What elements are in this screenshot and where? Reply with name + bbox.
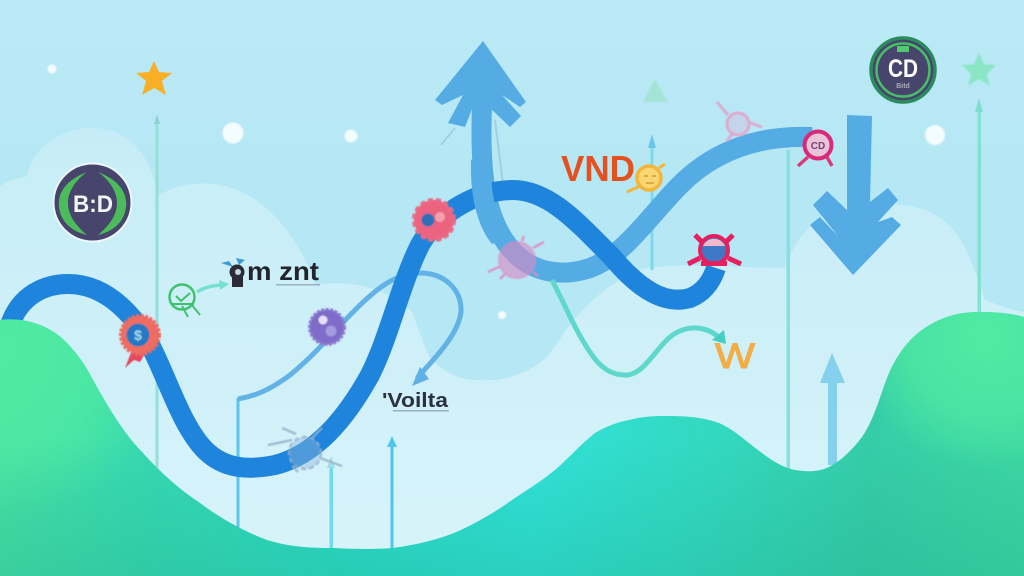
- small up arrow: [820, 353, 845, 465]
- large pale blue up arrow curve: [435, 41, 812, 273]
- icon: pink virus top: [717, 102, 762, 141]
- teal curved arrow to W: [552, 280, 726, 375]
- badge: CD: CD: [888, 55, 918, 83]
- decorative dots: [48, 64, 945, 319]
- icon: coral gear: [414, 200, 454, 240]
- faint guide lines: [441, 120, 505, 200]
- icon: magenta skull virus: [688, 235, 741, 266]
- front hills: [0, 312, 1024, 576]
- icon: grey gear virus: [268, 428, 342, 472]
- label: W: W: [715, 337, 755, 376]
- pale curve passing over dark curve: [481, 160, 500, 238]
- label: VND: VND: [561, 148, 635, 189]
- icon: pink virus: [488, 236, 544, 279]
- badge: BD: B:D: [73, 191, 113, 218]
- icon: red ribbon badge: $: [134, 327, 142, 343]
- label: Voilta: 'Voilta: [382, 390, 449, 412]
- icon: faded green star: [962, 53, 996, 86]
- label: m znt logo: [221, 256, 320, 287]
- badge: CD: Bitd: [896, 83, 910, 90]
- icon: red ribbon badge: [121, 316, 159, 368]
- icon: purple gear: [310, 310, 344, 344]
- icon: orange star: [136, 61, 172, 95]
- icon: green check with arrow: [170, 280, 229, 317]
- vertical arrow lines: [154, 98, 983, 555]
- badge: CD: [871, 38, 935, 102]
- icon: magenta CD virus: CD: [811, 141, 825, 152]
- icon: faded green triangle marker: [643, 79, 668, 102]
- background clouds: [0, 128, 1024, 576]
- label: m znt logo: m znt: [247, 256, 319, 286]
- icon: yellow virus: [627, 164, 665, 192]
- icon: magenta CD virus: [798, 132, 832, 166]
- badge: BD: [54, 164, 132, 242]
- thick down arrow: [810, 115, 901, 275]
- main dark blue curve: [10, 190, 716, 468]
- thin blue curved arrow: [238, 273, 461, 399]
